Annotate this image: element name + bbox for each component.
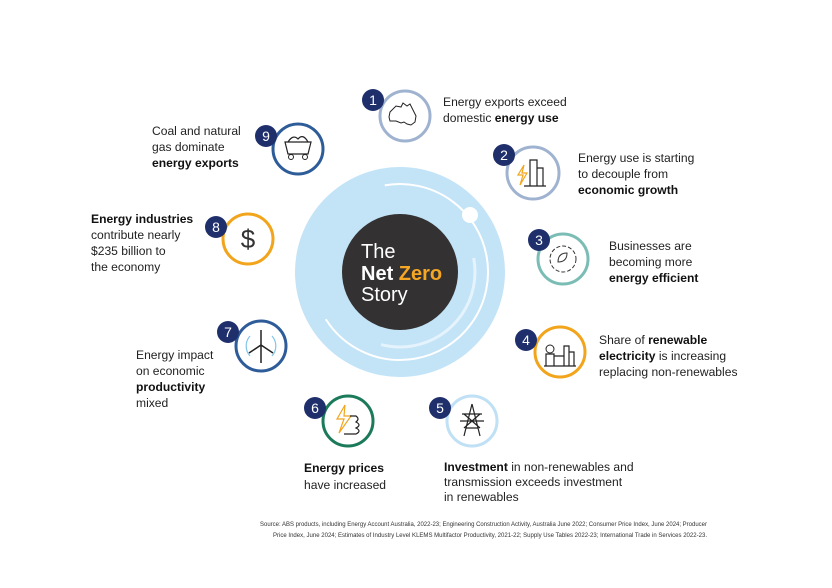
item 4 (515, 327, 738, 379)
item 8: $235 billion to (91, 244, 166, 258)
item 1 (362, 89, 567, 141)
item 4: Share of renewable (599, 333, 708, 347)
item 3 (528, 229, 698, 285)
item 5: Investment in non-renewables and (444, 460, 634, 474)
item 7: Energy impact (136, 348, 214, 362)
item 2: to decouple from (578, 167, 668, 181)
item 3: 3 (535, 232, 543, 248)
item 5 (429, 396, 634, 504)
item 4: replacing non-renewables (599, 365, 738, 379)
item 2 (493, 144, 694, 199)
item 9: gas dominate (152, 140, 225, 154)
item 8: Energy industries (91, 212, 193, 226)
item 8: the economy (91, 260, 161, 274)
item 3: Businesses are (609, 239, 692, 253)
item 9 (152, 124, 323, 174)
item 8: 8 (212, 219, 220, 235)
item 2: 2 (500, 147, 508, 163)
title: The Net Zero Story: The (361, 241, 395, 263)
item 8: $ (241, 224, 256, 254)
item 6: have increased (304, 478, 386, 492)
item 9: 9 (262, 128, 270, 144)
item 1: domestic energy use (443, 111, 559, 125)
item 7: productivity (136, 380, 205, 394)
item 4: 4 (522, 332, 530, 348)
title: The Net Zero Story: Story (361, 284, 408, 306)
source note (260, 521, 708, 539)
source note: Price Index, June 2024; Estimates of Industry Level KLEMS Multifactor Productivity, 2021-22; Supply Use Tables 2022-23; International Trade in Services 2022-23. (273, 532, 707, 539)
item 8: contribute nearly (91, 228, 181, 242)
source note: Source: ABS products, including Energy Account Australia, 2022-23; Engineering Construction Activity, Australia June 2022; Consumer Price Index, June 2024; Producer (260, 521, 708, 528)
item 9: Coal and natural (152, 124, 241, 138)
item 5: 5 (436, 400, 444, 416)
item 1: 1 (369, 92, 377, 108)
item 8 (91, 212, 273, 274)
item 7 (136, 321, 286, 410)
item 4: electricity is increasing (599, 349, 726, 363)
item 3: becoming more (609, 255, 693, 269)
item 1: Energy exports exceed (443, 95, 567, 109)
item 3: energy efficient (609, 271, 698, 285)
title: The Net Zero Story (361, 241, 442, 306)
central graphic (295, 167, 505, 377)
item 5: in renewables (444, 490, 519, 504)
title: The Net Zero Story: Net Zero (361, 263, 442, 285)
item 6 (304, 396, 386, 492)
item 7: on economic (136, 364, 205, 378)
item 7: 7 (224, 324, 232, 340)
item 2: Energy use is starting (578, 151, 694, 165)
item 6: 6 (311, 400, 319, 416)
item 6: Energy prices (304, 461, 384, 475)
item 2: economic growth (578, 183, 678, 197)
item 7: mixed (136, 396, 168, 410)
item 9: energy exports (152, 156, 239, 170)
item 5: transmission exceeds investment (444, 475, 623, 489)
